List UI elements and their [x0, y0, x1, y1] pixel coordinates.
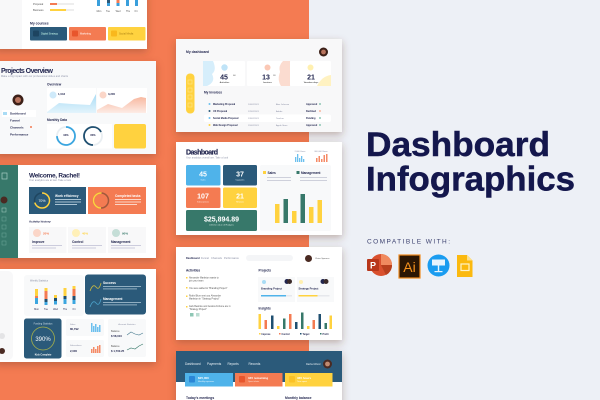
panel: welcome slide [0, 165, 156, 258]
panel: top-left dashboard slide: My courses [30, 22, 49, 26]
sparkline panel: Account Statistics [118, 323, 137, 326]
stat card: activities: 45 [220, 74, 228, 82]
side menu: Channels [10, 126, 24, 130]
sparkline panel: Balance [111, 330, 120, 333]
tile: revenue: Lifetime value of Rodgers [209, 224, 235, 226]
donut charts: 90% [63, 133, 69, 137]
activity cards: 20% [43, 232, 49, 236]
insights legend: Improve [262, 334, 271, 336]
stacked bars: top slide: Thu [126, 10, 131, 13]
icon: PowerPoint [367, 254, 392, 276]
chart: orange area [97, 88, 147, 113]
panel: meetings slide: Monthly balance [285, 396, 312, 400]
activity cards: 90% [122, 232, 128, 236]
success and management card: Success [103, 281, 116, 285]
heading: my dashboard: My dashboard [186, 50, 209, 54]
insights legend: Target [302, 333, 310, 336]
top navigation [186, 255, 330, 262]
side menu [2, 110, 36, 136]
panel: projects overview slide: Overview [47, 82, 62, 86]
mini chart: orange: Subscribers [70, 344, 82, 347]
tile: 37 [223, 165, 257, 186]
projects [258, 268, 334, 302]
work efficiency card [29, 187, 86, 214]
header bar: Reports [228, 362, 239, 366]
mini chart: orange: 2,000 [70, 349, 77, 353]
activities list: "Strategy Project" [189, 308, 207, 311]
stat card: invoices: Invoices [263, 82, 273, 84]
panel: projects overview slide: Monthly Data [47, 118, 67, 122]
projects: Branding Project [261, 286, 282, 290]
chart panel: sales vs management: Sales [268, 171, 276, 175]
tile: 21 [223, 188, 257, 208]
invoice table: Adobe [276, 110, 283, 113]
ring: 390% card: Funding Statistics [34, 322, 53, 326]
stacked bars: top slide [97, 0, 138, 13]
course buttons [30, 27, 146, 40]
title: Infographics [366, 160, 575, 198]
panel: welcome slide: Your analytics are at last. Take a look [29, 179, 72, 182]
stacked bar chart: Wed [53, 308, 59, 311]
activity cards: Management [111, 240, 131, 244]
tile: yellow [285, 373, 332, 386]
mini chart: blue [66, 319, 104, 336]
sparkline panel [108, 319, 146, 357]
top navigation: Claire Spencer [315, 257, 330, 260]
mini chart: orange header [314, 151, 328, 162]
activity cards [29, 227, 146, 253]
header bar: Dashboard [185, 362, 201, 366]
tile: 37: Upgrades [236, 180, 244, 182]
tile: 21: 21 [236, 194, 244, 200]
activities list: Jack Beatrice and Jessica Fortune are in [189, 305, 231, 308]
tile: orange: 345 remaining [248, 376, 268, 380]
panel: top-left dashboard slide: Proposal [33, 2, 44, 6]
tile: 107: 107 [197, 194, 209, 200]
tile: 45: Sales [200, 180, 206, 182]
invoice table: Approved [306, 124, 318, 127]
insights bar chart: Insights [258, 306, 271, 310]
tile: yellow: Time spent [297, 380, 307, 383]
activities list: Activities [186, 268, 200, 272]
invoice table: Alex Johnson [276, 103, 290, 106]
stat card: activities: /60 [233, 75, 237, 77]
activities list: Markston in "Strategy Project" [189, 298, 220, 300]
compatible with label: COMPATIBLE WITH: [367, 238, 450, 246]
tile: 21: Reviews [236, 202, 244, 204]
invoice table: Marketing Proposal [213, 103, 236, 106]
insights bar chart [258, 306, 332, 329]
tile: 107 [186, 188, 220, 208]
sidebar [0, 165, 18, 258]
stat card: activities: Activities [220, 81, 230, 84]
heading: dashboard: Dashboard [186, 150, 218, 156]
mini chart: blue header [295, 151, 305, 162]
course buttons: Digital Strategy [41, 32, 59, 36]
header bar: Records [248, 362, 261, 366]
tile: 37: 37 [236, 172, 244, 178]
activities list: Alexander Markston wants to [189, 276, 219, 280]
activity cards: Control [72, 240, 83, 244]
invoice table: Social Media Proposal [213, 117, 239, 120]
mini chart: blue: 80,792 [70, 327, 79, 331]
invoice table: Pending [306, 117, 316, 120]
success and management card: Management [103, 297, 123, 301]
invoice table: Declined [306, 110, 317, 113]
panel: metrics slide [0, 269, 156, 362]
stacked bar chart: Mon [34, 308, 39, 311]
stat card: vacation days: 21 [307, 74, 315, 82]
activities list: Robin Blum sent you Alexander [189, 294, 221, 298]
stacked bars: top slide: Fri [135, 10, 138, 13]
work efficiency card: Work efficiency [55, 194, 79, 198]
invoice table: 12/02/2021 [248, 111, 260, 113]
projects: Projects [258, 268, 271, 272]
invoice table [204, 103, 331, 127]
insights legend [259, 333, 329, 336]
chart: blue area: 1,043 [58, 92, 65, 96]
avatar [319, 48, 328, 56]
activity cards: Improve [32, 240, 45, 244]
tile: 45: 45 [199, 172, 207, 178]
stacked bar chart: Tue [44, 308, 49, 311]
tile: revenue: $25,894.89 [204, 216, 239, 224]
chart panel: sales vs management [260, 165, 331, 231]
invoice table: 15/02/2021 [248, 125, 260, 127]
top navigation: Performance [224, 256, 239, 260]
mini chart: blue: Sales [70, 324, 76, 326]
invoice table: Teacher [276, 117, 284, 120]
top navigation: Funnel [201, 256, 209, 260]
header bar: Rachel Wood [306, 363, 321, 366]
chart panel: sales vs management: Management [301, 171, 321, 175]
activities list: You were added to "Branding Project" [189, 287, 228, 290]
title: Dashboard [366, 126, 550, 164]
heading: welcome: Welcome, Rachel! [29, 172, 80, 180]
ring: 390% card: Kick Complete [35, 354, 52, 356]
stacked bar chart: Fri [73, 308, 76, 311]
panel: dashboard tiles slide: Your analytics overall are. Take a look [186, 156, 229, 160]
heading: projects overview: Projects Overview [1, 68, 54, 75]
tile: orange [235, 373, 282, 386]
tile: blue: $25,000 [198, 376, 209, 380]
panel: my dashboard slide: My Invoices [204, 90, 222, 94]
completed tasks card: Completed tasks [115, 194, 141, 198]
panel: projects overview slide: Make a big impact with our professional slides and charts [1, 75, 69, 78]
ring: 390% card [24, 318, 62, 358]
stacked bar chart [24, 275, 84, 316]
activities list: join your team [188, 280, 204, 282]
icon: Google Slides [457, 255, 472, 277]
tile: yellow: 365 hours [297, 376, 312, 380]
tile: blue [185, 373, 233, 386]
stacked bar chart: Thu [63, 308, 68, 311]
success and management card [85, 274, 146, 314]
course buttons: Marketing [80, 32, 92, 36]
side menu: Dashboard [10, 112, 26, 116]
ring: 390% card: 390% [35, 337, 51, 343]
stacked bars: top slide: Mon [97, 10, 102, 13]
yellow note [114, 124, 146, 148]
side menu: Performance [10, 132, 29, 136]
insights legend: Control [282, 333, 290, 336]
header bar [176, 351, 342, 382]
panel: top-left dashboard slide [0, 0, 147, 49]
projects: Strategy Project [298, 286, 319, 290]
course buttons: Social Media [119, 32, 134, 36]
top navigation: Channels [211, 256, 223, 260]
stat card: activities [203, 61, 245, 86]
sparkline panel: $ 58,010 [111, 334, 122, 338]
title [366, 126, 575, 198]
work efficiency card: 70% [38, 199, 46, 203]
insights legend: Profit [322, 333, 329, 336]
mini chart: blue header: 2,000 Users [295, 151, 305, 153]
panel: welcome slide: Activity history [29, 220, 51, 224]
invoice table: Web Design Proposal [213, 124, 238, 127]
panel: projects overview slide [0, 61, 156, 154]
tile: blue: Monthly expenses [198, 380, 214, 383]
icon: PowerPoint: P [370, 260, 376, 270]
tile: 107: Subscriptions [197, 200, 209, 204]
stacked bar chart: Weekly Statistics [30, 280, 49, 282]
donut charts [47, 124, 112, 148]
sparkline panel: Balance [111, 345, 120, 348]
chart: blue area [47, 88, 96, 113]
tile: orange: Open tickets [248, 380, 259, 383]
panel: meetings slide [176, 351, 342, 400]
stacked bars: top slide: Wed [116, 10, 121, 13]
panel: dashboard tiles slide [176, 142, 342, 235]
activities list [186, 268, 231, 316]
invoice table: 10/02/2021 [248, 104, 260, 106]
icon: Illustrator: Ai [403, 259, 416, 275]
side menu: Funnel [10, 118, 20, 122]
panel: meetings slide: Today's meetings [186, 396, 214, 400]
activity cards: 40% [82, 232, 88, 236]
donut charts: 80% [90, 133, 96, 137]
stat card: invoices: /20 [273, 75, 277, 77]
tile: revenue [186, 210, 257, 231]
avatar [12, 94, 24, 106]
panel: my dashboard slide [176, 39, 342, 132]
completed tasks card [88, 187, 146, 214]
panel: activities slide [176, 247, 342, 340]
chart: orange area: 3,200 [108, 92, 115, 96]
invoice table: Approved [306, 103, 318, 106]
icon: Keynote [428, 254, 450, 276]
yellow sidebar [186, 74, 194, 114]
header bar: Payments [207, 362, 222, 366]
stat card: vacation days [290, 61, 331, 86]
top navigation: Dashboard [186, 256, 200, 260]
mini chart: orange [66, 340, 104, 357]
panel: top-left dashboard slide: Business [33, 8, 44, 12]
stat card: invoices [247, 61, 290, 86]
mini chart: orange header: 800,000 Views [314, 151, 328, 153]
stat card: invoices: 13 [262, 74, 270, 82]
sparkline panel: $ 1,700.25 [111, 349, 125, 353]
icon: Illustrator [399, 255, 420, 278]
invoice table: Apple Store [276, 124, 288, 127]
stacked bars: top slide: Tue [106, 10, 111, 13]
invoice table: 13/02/2021 [248, 118, 260, 120]
tile: 45 [186, 165, 220, 186]
invoice table: UX Proposal [213, 110, 228, 113]
stat card: vacation days: Vacation days [304, 81, 319, 84]
